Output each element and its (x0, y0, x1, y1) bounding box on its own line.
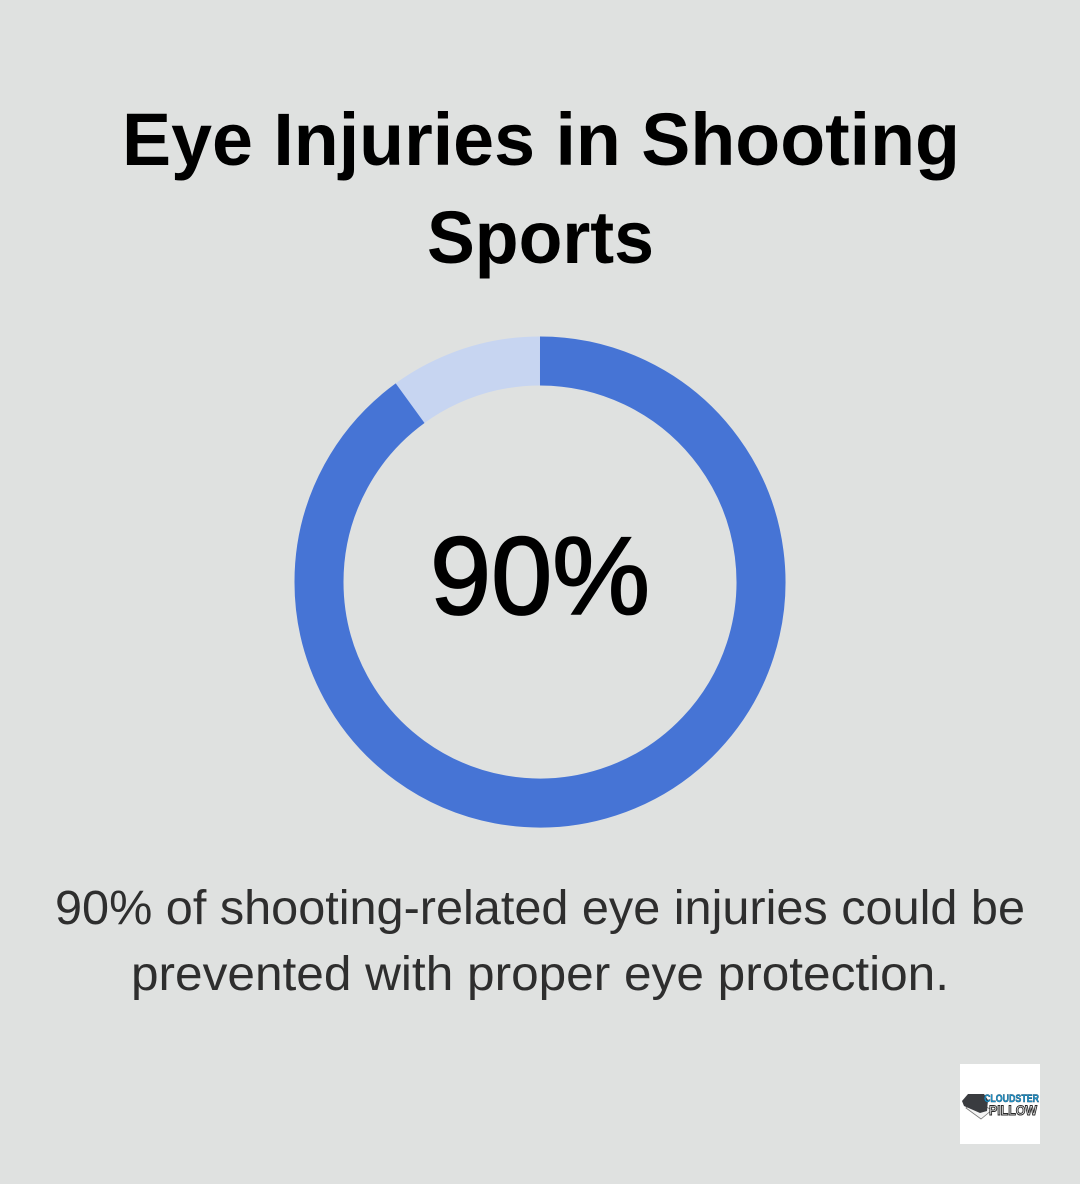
icon: pillow (962, 1094, 992, 1119)
logo wordmark: PILLOW (989, 1102, 1038, 1118)
donut value: 90% (430, 515, 650, 638)
description text: 90% of shooting-related eye injuries could be (55, 882, 1025, 935)
logo wordmark (984, 1093, 1039, 1118)
logo wordmark: CLOUDSTER (984, 1093, 1039, 1105)
donut chart: 90% (319, 361, 761, 803)
title: Eye Injuries in Shooting (122, 98, 960, 181)
title (122, 98, 960, 279)
logo: Cloudster Pillow (960, 1064, 1040, 1144)
title: Sports (427, 196, 654, 279)
description text: prevented with proper eye protection. (131, 948, 949, 1001)
description text (55, 882, 1025, 1001)
